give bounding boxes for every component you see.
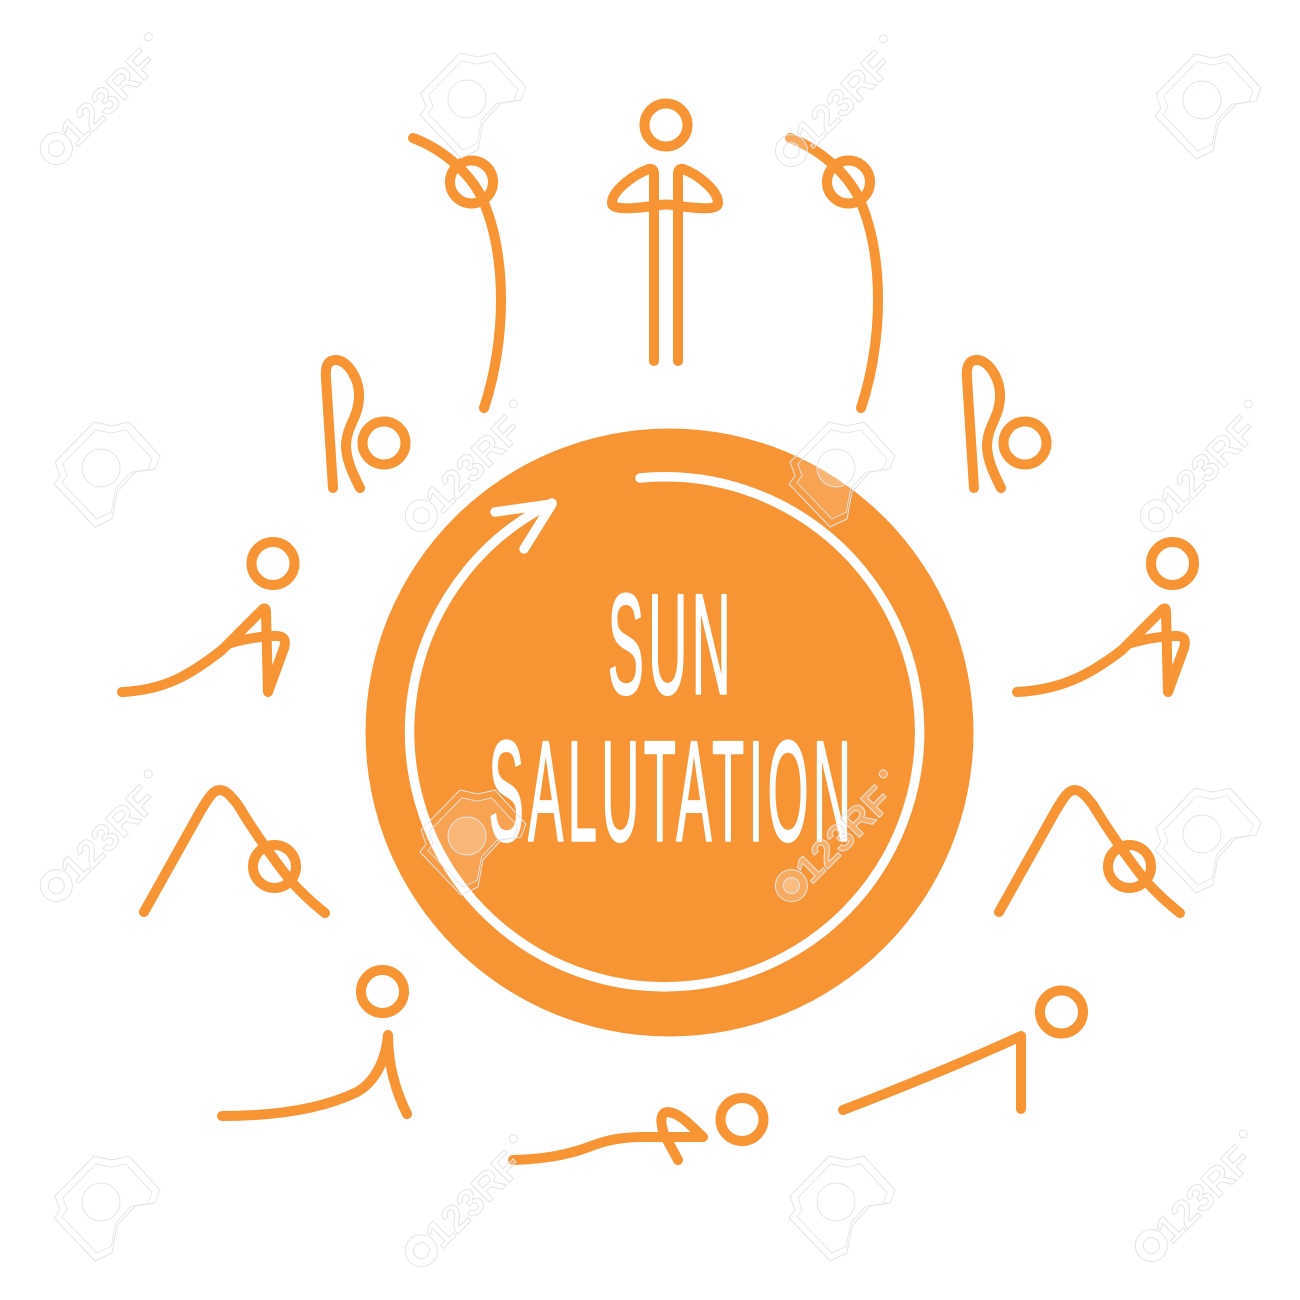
watermark text 9: 123RF [52,778,166,892]
watermark egg 12 [1155,788,1261,893]
watermark egg 7 [789,422,895,527]
sun disc [366,428,974,1036]
pose 11: eight-limbed [513,1098,764,1160]
watermark text 3 [766,32,912,178]
watermark egg 4 [1155,54,1261,159]
pose 4: forward fold left [326,360,406,488]
title: SALUTATION [489,710,855,871]
watermark egg 10 [420,790,526,895]
watermark egg 2 [420,53,526,158]
watermark text 16: 123RF [1147,1138,1261,1252]
watermark text 6: 123RF [417,408,531,522]
watermark text 11: 123RF [787,778,901,892]
watermark text 14: 123RF [417,1143,531,1257]
watermark text 1: 123RF [52,41,166,155]
title: SUN [608,564,735,724]
circular arrow [410,477,920,987]
watermark text 14 [396,1132,542,1278]
title [489,564,855,871]
watermark text 8 [1131,397,1277,543]
watermark egg 15 [789,1156,895,1261]
pose 1: standing prayer [612,104,718,361]
watermark egg 13 [54,1156,160,1261]
watermark text 3: 123RF [787,43,901,157]
watermark text 8: 123RF [1152,408,1266,522]
watermark text 9 [31,767,177,913]
pose 8: downward dog left [144,790,325,913]
pose 2: raised arms left [413,138,501,408]
watermark text 6 [396,397,542,543]
watermark egg 5 [54,422,160,527]
pose 7: lunge right [1017,542,1194,692]
pose 9: downward dog right [999,790,1180,913]
pose 3: raised arms right [790,138,878,408]
watermark text 16 [1126,1127,1272,1273]
watermark text 11 [766,767,912,913]
pose 5: forward fold right [967,360,1046,488]
watermark text 1 [31,30,177,176]
pose 10: cobra [222,970,407,1116]
pose 6: lunge left [122,542,294,692]
pose 12: plank [843,990,1083,1110]
